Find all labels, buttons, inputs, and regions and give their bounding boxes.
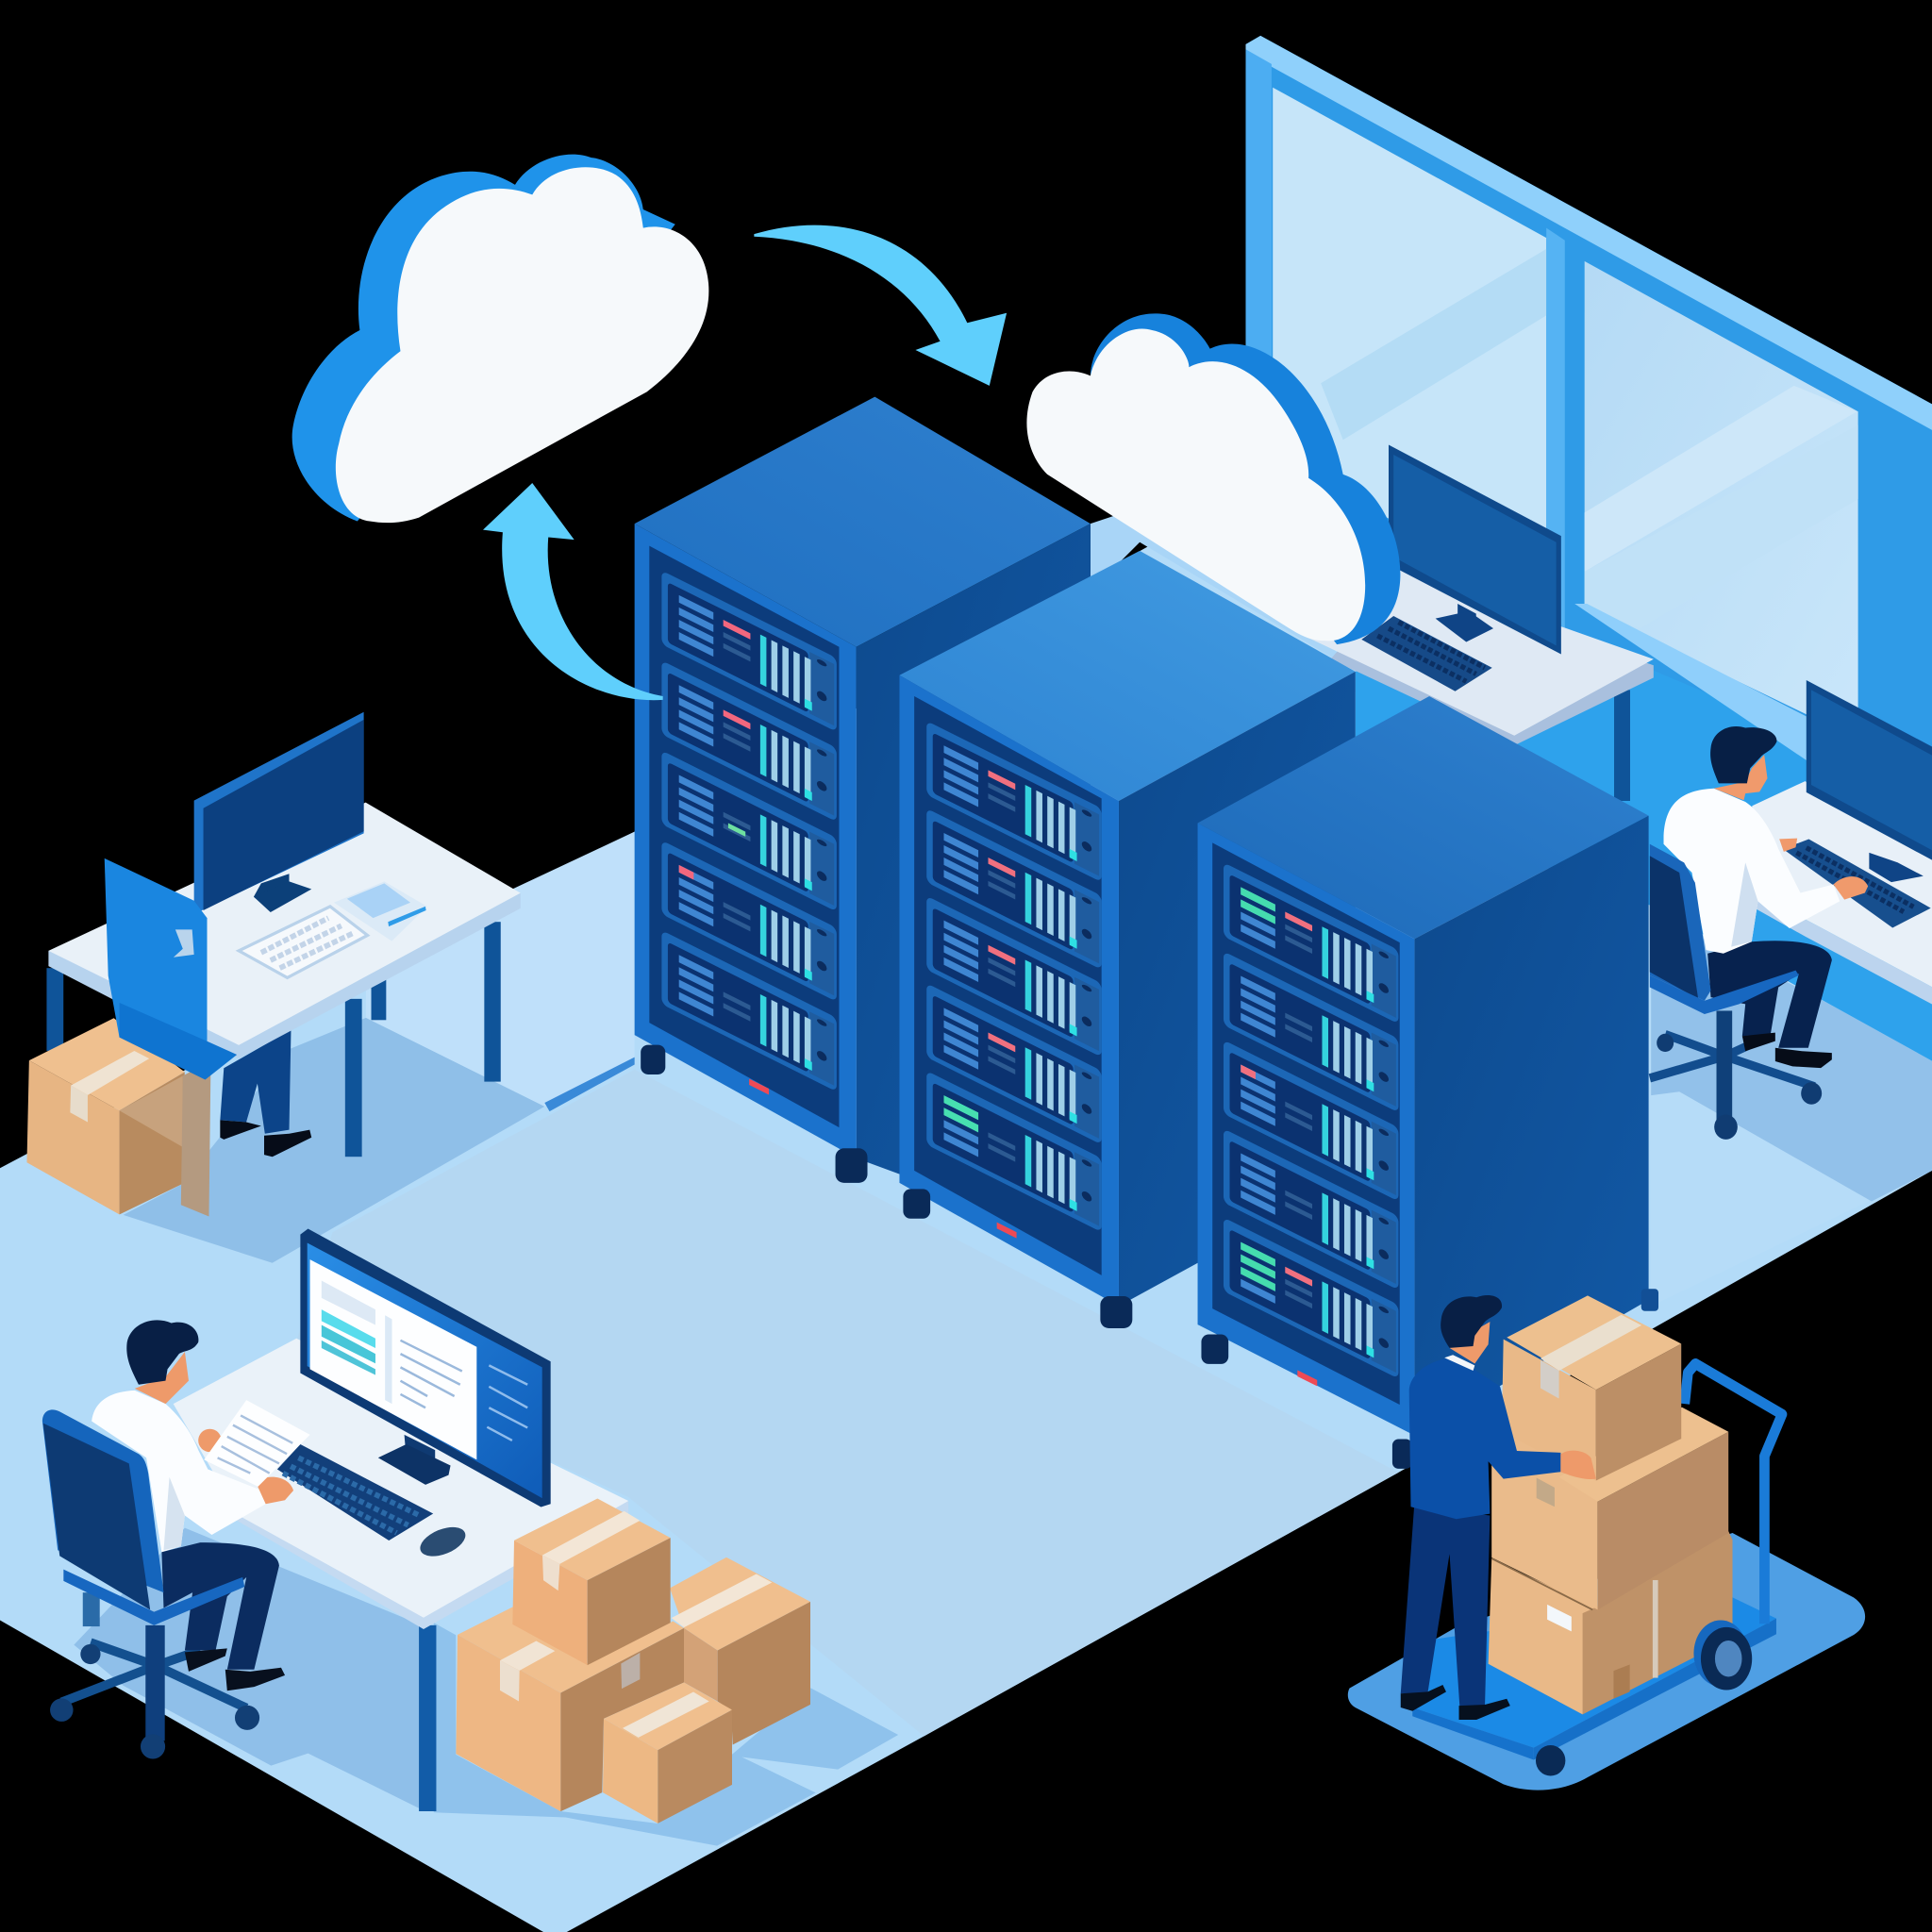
server rack 3 — [1198, 696, 1658, 1469]
small wheel — [1536, 1745, 1565, 1776]
left white keyboard — [239, 907, 368, 977]
mouse — [416, 1522, 470, 1562]
box small front — [603, 1682, 732, 1824]
floor cable — [544, 1058, 635, 1111]
left person legs — [220, 1029, 311, 1157]
monitor — [300, 1228, 551, 1507]
floor — [0, 492, 1932, 1932]
middle box — [1491, 1407, 1728, 1609]
chair base — [1650, 1010, 1822, 1140]
chair seat — [1650, 971, 1799, 1014]
bottom box — [1489, 1531, 1733, 1714]
hair — [1710, 726, 1777, 783]
server rack 1 — [635, 397, 1091, 1244]
person — [92, 1320, 310, 1690]
window pane right — [1585, 261, 1858, 740]
hair — [126, 1320, 198, 1385]
lower left workstation — [42, 1228, 628, 1811]
right floor lighter zone — [1649, 899, 1932, 1306]
shirt — [1664, 789, 1840, 954]
right workstation — [1650, 680, 1932, 1140]
cloud right — [1026, 313, 1400, 644]
keyboard — [1361, 616, 1492, 691]
window pane left — [1273, 88, 1546, 604]
status light — [749, 1079, 769, 1094]
shadow under lower desk — [74, 1528, 425, 1811]
keyboard — [277, 1444, 433, 1541]
neck and ear — [1450, 1322, 1490, 1364]
hair — [1441, 1295, 1502, 1348]
server rack 2 — [899, 551, 1356, 1328]
dolly scene — [1348, 1295, 1865, 1790]
suit — [1409, 1358, 1560, 1519]
back floor strip — [1356, 610, 1932, 1061]
right floor chair shadow — [1651, 912, 1932, 1201]
left desk workstation — [26, 712, 521, 1216]
shoes — [185, 1648, 285, 1690]
frame top edge — [1245, 36, 1932, 430]
arrow: cloud to cloud — [754, 225, 1007, 386]
dolly floor pad — [1348, 1533, 1865, 1790]
central walkway — [295, 1070, 1398, 1736]
trousers — [161, 1542, 279, 1670]
cloud left — [292, 155, 708, 523]
left desk legs — [46, 922, 501, 1157]
left blue chair — [105, 858, 237, 1080]
chair back — [1650, 844, 1711, 1001]
front — [635, 524, 857, 1158]
cart platform — [1412, 1596, 1776, 1760]
hands — [256, 1477, 293, 1504]
wheels — [641, 1045, 868, 1183]
side — [857, 524, 1091, 1244]
cardboard box left — [26, 1018, 210, 1216]
box front left — [456, 1606, 684, 1811]
hands — [1779, 839, 1868, 900]
left monitor — [194, 712, 364, 914]
drawers — [1224, 862, 1398, 1379]
right monitor — [1807, 680, 1932, 882]
desk top — [235, 1501, 628, 1629]
drawers — [926, 721, 1102, 1232]
paper — [204, 1400, 310, 1487]
man with boxes — [1401, 1295, 1596, 1720]
screen window — [310, 1259, 476, 1459]
window sill — [1574, 604, 1860, 770]
left desk papers — [334, 881, 427, 941]
box top — [512, 1498, 671, 1665]
drawers — [661, 571, 837, 1091]
chair back and seat — [42, 1409, 244, 1625]
shadow under left desk — [124, 1018, 544, 1263]
top box — [1502, 1295, 1681, 1480]
shoes — [1401, 1685, 1510, 1720]
shadow of box stack — [434, 1623, 898, 1846]
neck and face — [135, 1352, 189, 1404]
hand — [1560, 1451, 1596, 1479]
desk leg — [419, 1625, 436, 1811]
shoes — [1742, 1033, 1832, 1068]
big wheel — [1693, 1621, 1752, 1690]
right chair and person — [1650, 726, 1868, 1140]
trousers — [1401, 1507, 1490, 1706]
back desk workstation — [1293, 445, 1654, 801]
window wall — [1245, 36, 1932, 789]
arrow: rack to cloud — [483, 483, 663, 700]
cart handle — [1685, 1364, 1782, 1624]
trousers — [1707, 941, 1832, 1048]
top — [635, 397, 1091, 647]
right keyboard — [1783, 839, 1931, 928]
shirt — [92, 1391, 266, 1552]
floor gap between racks — [1091, 492, 1356, 672]
left desk top — [48, 893, 521, 1058]
patch beside left desk — [366, 832, 635, 1107]
frame left edge — [1245, 49, 1272, 443]
collar — [1444, 1355, 1474, 1371]
desk top — [1331, 576, 1654, 745]
box back right — [670, 1557, 810, 1744]
face — [1714, 755, 1768, 800]
cardboard box stack — [456, 1498, 810, 1824]
chair base — [50, 1592, 259, 1758]
monitor — [1389, 445, 1561, 655]
right desk — [1755, 893, 1932, 1004]
desk leg — [1614, 690, 1630, 801]
mullion — [1546, 228, 1565, 628]
